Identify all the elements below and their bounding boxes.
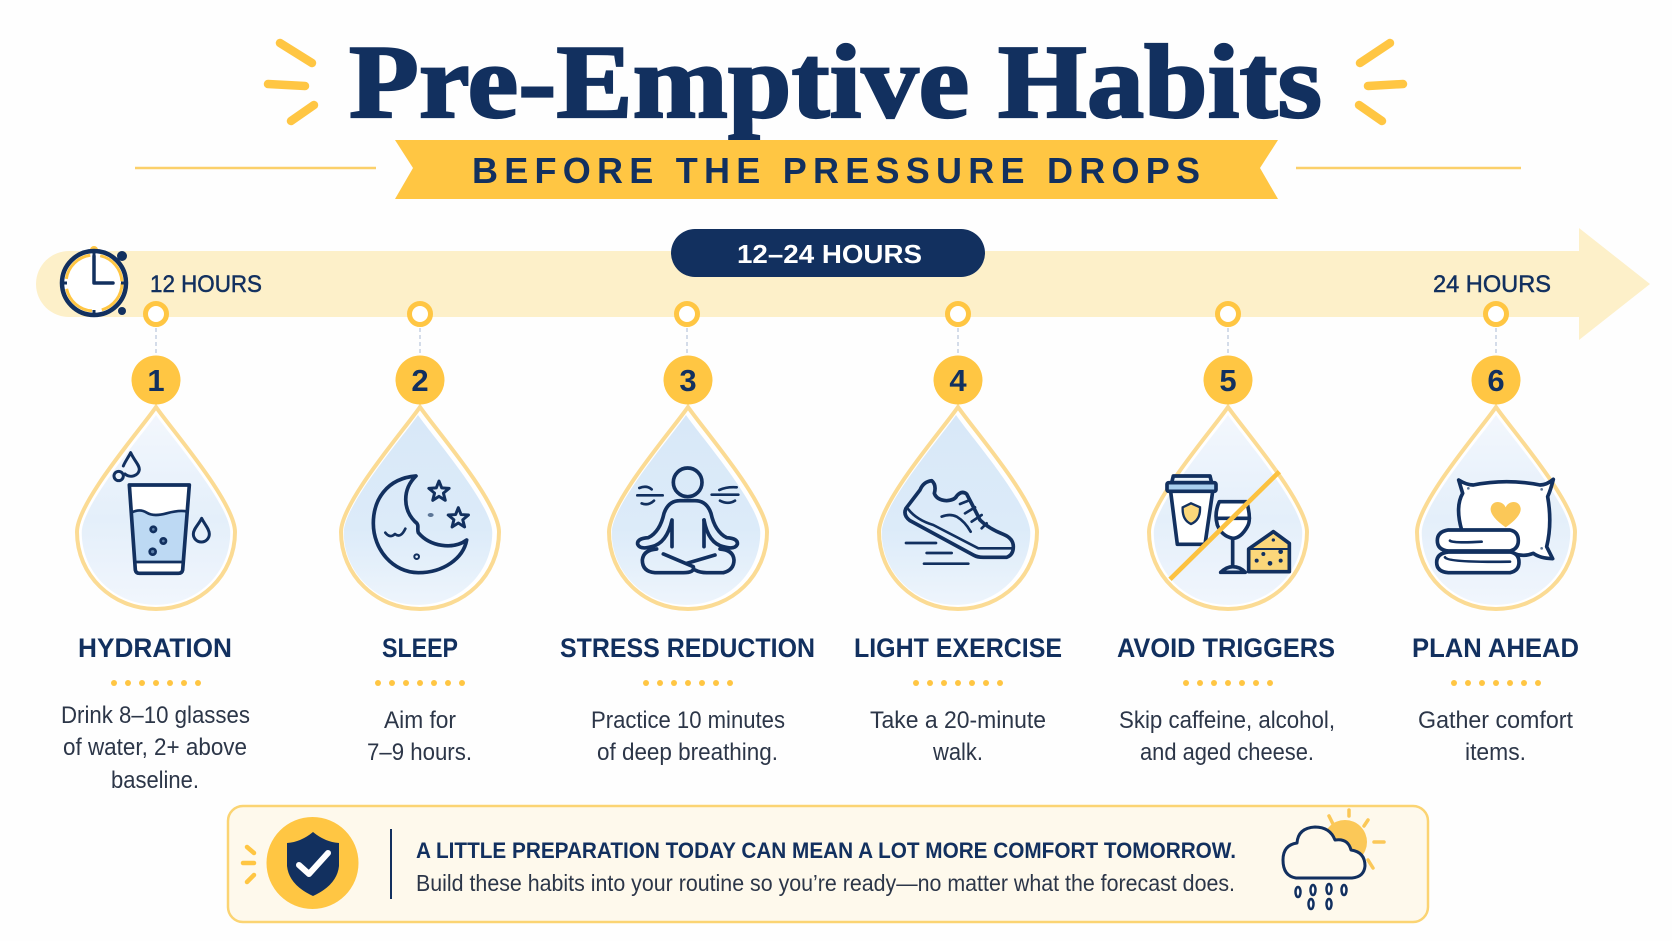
description: and aged cheese. (1140, 739, 1314, 766)
number badge 5 (1204, 356, 1252, 404)
title: Pre-Emptive Habits (349, 23, 1322, 140)
dots (1451, 680, 1541, 686)
dots (1183, 680, 1273, 686)
icon: coffee, wine and cheese crossed out (1167, 472, 1289, 579)
number badge 3: 3 (679, 363, 697, 398)
heading: STRESS REDUCTION (560, 633, 815, 663)
description: Drink 8–10 glasses (61, 702, 250, 729)
description (61, 702, 250, 794)
subtitle ribbon: BEFORE THE PRESSURE DROPS (472, 150, 1200, 191)
description: Skip caffeine, alcohol, (1119, 707, 1335, 734)
timeline nodes (146, 304, 1506, 324)
droplet 4 (879, 407, 1037, 609)
description: baseline. (111, 767, 199, 794)
number badge 5: 5 (1219, 363, 1237, 398)
description (367, 707, 472, 766)
droplet 6 (1417, 407, 1575, 609)
dots (111, 680, 201, 686)
description: items. (1465, 739, 1526, 766)
dots (375, 680, 465, 686)
description: of water, 2+ above (63, 734, 247, 761)
icon: glass of water (114, 453, 209, 573)
number badge 6 (1472, 356, 1520, 404)
description: Practice 10 minutes (591, 707, 785, 734)
description: of deep breathing. (597, 739, 778, 766)
number badge 6: 6 (1487, 363, 1505, 398)
number badge 3 (664, 356, 712, 404)
number badge 2 (396, 356, 444, 404)
timeline range pill (671, 229, 985, 277)
description: walk. (932, 739, 983, 766)
panel: stress reduction (560, 356, 815, 766)
icon: left sparks (268, 43, 314, 121)
dots (913, 680, 1003, 686)
number badge 1 (132, 356, 180, 404)
description (1418, 707, 1573, 766)
label: 12 hours: 12 HOURS (150, 271, 262, 298)
heading: SLEEP (382, 633, 458, 663)
number badge 4 (934, 356, 982, 404)
droplet 3 (609, 407, 767, 609)
description (1119, 707, 1335, 766)
description: Take a 20-minute (870, 707, 1046, 734)
icon: clock (62, 246, 127, 315)
heading: PLAN AHEAD (1412, 633, 1579, 663)
icon: moon and stars (373, 476, 468, 573)
panel: sleep (341, 356, 499, 766)
icon: shield badge (266, 817, 358, 909)
dots (643, 680, 733, 686)
number badge 1: 1 (147, 363, 165, 398)
timeline range pill: 12–24 HOURS (737, 239, 922, 269)
description (591, 707, 785, 766)
panel: avoid triggers (1117, 356, 1335, 766)
description: Aim for (384, 707, 456, 734)
heading: HYDRATION (78, 633, 232, 663)
heading: LIGHT EXERCISE (854, 633, 1062, 663)
icon: shield sparks (243, 847, 254, 882)
icon: cloud with sun and rain (1283, 810, 1384, 909)
panel: plan ahead (1412, 356, 1579, 766)
droplet 5 (1149, 407, 1307, 609)
label: 24 hours: 24 HOURS (1433, 271, 1551, 298)
description: Gather comfort (1418, 707, 1573, 734)
timeline arrow (36, 228, 1650, 340)
subtitle ribbon (395, 140, 1278, 199)
droplet 2 (341, 407, 499, 609)
droplet 1 (77, 407, 235, 609)
callout headline: A LITTLE PREPARATION TODAY CAN MEAN A LOT MORE COMFORT TOMORROW. (416, 838, 1236, 863)
heading: AVOID TRIGGERS (1117, 633, 1335, 663)
description: 7–9 hours. (367, 739, 472, 766)
icon: running shoe (905, 481, 1013, 564)
panel: hydration (61, 356, 250, 794)
description (870, 707, 1046, 766)
icon: meditating person (637, 468, 738, 573)
number badge 4: 4 (949, 363, 967, 398)
panel: light exercise (854, 356, 1062, 766)
number badge 2: 2 (411, 363, 429, 398)
icon: right sparks (1359, 43, 1403, 121)
callout body: Build these habits into your routine so you’re ready—no matter what the forecast does. (416, 870, 1235, 896)
icon: pillow and blankets (1437, 479, 1553, 573)
panel: bottom callout (228, 806, 1428, 922)
